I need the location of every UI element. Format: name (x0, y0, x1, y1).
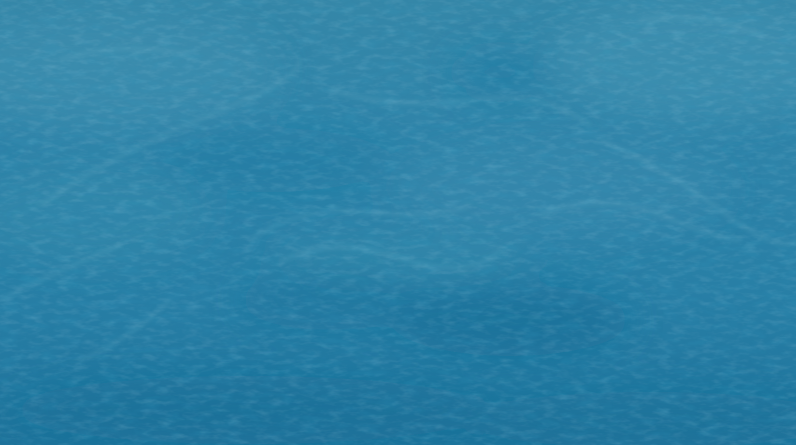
soft wave crests (0, 17, 796, 360)
